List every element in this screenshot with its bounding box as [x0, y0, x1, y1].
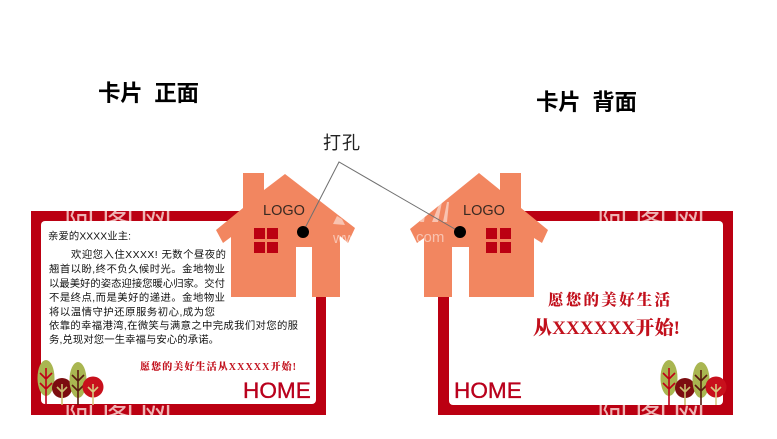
- text block: letter: 依靠的幸福港湾,在微笑与满意之中完成我们对您的服: [49, 319, 299, 332]
- icon: house front: [216, 173, 355, 297]
- callout: punch hole leader line: [303, 162, 460, 232]
- text block: letter: 翘首以盼,终不负久候时光。金地物业: [49, 262, 225, 276]
- house back logo: LOGO: [463, 203, 505, 219]
- watermark on card frames: 阿图网: [597, 397, 711, 433]
- label: HOME back: HOME: [454, 378, 522, 403]
- icon: trees front: [38, 360, 104, 405]
- watermark on card frames: [66, 211, 702, 415]
- panel: card front: [31, 211, 326, 415]
- icon: punch hole front: [297, 226, 309, 238]
- text block: letter: [48, 230, 299, 346]
- card back red frame: [438, 211, 733, 415]
- title: card front: 卡片 正面: [98, 81, 199, 106]
- label: punch hole: 打孔: [323, 133, 361, 153]
- text block: letter: 将以温情守护还原服务初心,成为您: [49, 306, 215, 318]
- watermark on card frames: 阿图网: [597, 203, 711, 239]
- house front window: [254, 228, 278, 253]
- text block: letter: 亲爱的XXXX业主:: [48, 230, 131, 242]
- text block: letter: 欢迎您入住XXXX! 无数个昼夜的: [71, 248, 226, 261]
- slogan: card front: 愿您的美好生活从XXXXX开始!: [140, 360, 296, 373]
- watermark on houses: [332, 202, 449, 247]
- text block: letter: 不是终点,而是美好的递进。金地物业: [49, 291, 225, 304]
- slogan: card back line two: 从XXXXXX开始!: [533, 317, 680, 339]
- text block: letter: 以最美好的姿态迎接您暖心归家。交付: [49, 277, 225, 290]
- card front red frame: [31, 211, 326, 415]
- title: card back: 卡片 背面: [536, 90, 637, 115]
- house back window: [486, 228, 511, 253]
- house front logo: LOGO: [263, 203, 305, 219]
- text block: letter: 务,兑现对您一生幸福与安心的承诺。: [49, 333, 219, 346]
- watermark on card frames: 阿图网: [64, 203, 178, 239]
- watermark on card frames: 阿图网: [64, 397, 178, 433]
- watermark on houses: com: [416, 229, 444, 246]
- icon: trees back: [660, 360, 726, 405]
- card front white area: [41, 221, 316, 404]
- icon: house back: [410, 173, 548, 297]
- icon: punch hole back: [454, 226, 466, 238]
- watermark on houses: ww: [332, 230, 355, 247]
- slogan: card back line one: 愿您的美好生活: [548, 290, 670, 309]
- panel: card back: [438, 211, 733, 415]
- label: HOME front: HOME: [243, 378, 311, 403]
- card back white area: [449, 221, 723, 405]
